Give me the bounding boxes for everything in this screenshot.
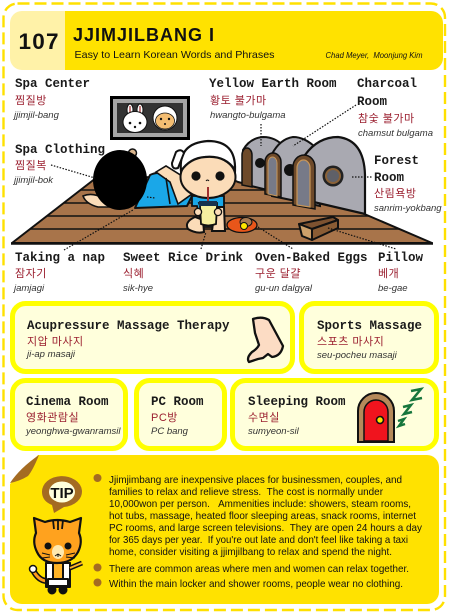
panel: cinema room: 영화관람실 [26,411,79,424]
panel: pc room: PC bang [151,426,189,437]
label: spa clothing: 찜질복 [15,159,47,172]
label: forest room: Forest [374,154,419,168]
label: forest room: 산림욕방 [374,187,416,200]
tip text: hot tubs, massage, heated floor sleeping areas, snack rooms, internet [109,511,416,522]
label: oven-baked eggs: gu-un dalgyal [255,283,313,294]
tip text [109,475,423,590]
label: charcoal room: Room [357,95,388,109]
label: spa center: Spa Center [15,77,90,91]
wall picture of rabbit and sheep [110,96,190,140]
tip bullets [94,474,102,586]
wood floor [11,176,433,244]
label: yellow earth room [209,77,337,121]
icon: zzz [398,389,422,426]
baked eggs plate [227,218,257,232]
label: forest room: sanrim-yokbang [374,203,442,214]
label: yellow earth room: 황토 불가마 [210,94,267,107]
panel: sleeping room [232,380,436,448]
tip text: PC rooms, and large screen televisions. They are open 24 hours a day [109,523,423,534]
panel: cinema room [12,380,126,448]
label: pillow: be-gae [378,283,408,294]
sleeping person [83,149,195,210]
tip text: Jjimjimbang are inexpensive places for businessmen, couples, and [109,475,402,486]
icon: red door [358,393,394,442]
subtitle: Easy to Learn Korean Words and Phrases [74,49,274,61]
tip text: 10,000won per person. Ammenities include: showers, steam rooms, [109,499,411,510]
label: spa clothing: jjimjil-bok [12,175,54,186]
tip text: families to relax and relieve stress. The cost is normally under [109,487,384,498]
tip text: There are common areas where men and women can relax together. [109,564,409,575]
label: oven-baked eggs: Oven-Baked Eggs [255,251,368,265]
label: spa clothing [12,143,105,186]
lesson number: 107 [18,29,58,54]
pillow [299,217,338,240]
boy with towel hat and drink [172,141,236,233]
label: forest room: Room [374,171,405,185]
label: sweet rice drink [123,251,244,294]
label: forest room [374,154,442,214]
panel: pc room: PC방 [151,411,178,424]
label: taking a nap: jamjagi [12,283,45,294]
panel: sleeping room: sumyeon-sil [248,426,300,437]
label: oven-baked eggs [255,251,368,294]
panel: tip [10,455,439,604]
label: yellow earth room: Yellow Earth Room [209,77,337,91]
panel: sleeping room: 수면실 [248,411,280,424]
label: yellow earth room: hwangto-bulgama [210,110,286,121]
label: spa clothing: Spa Clothing [15,143,105,157]
label: pillow: Pillow [378,251,424,265]
panel: cinema room: yeonghwa-gwanramsil [25,426,121,437]
panel: sports massage [302,304,436,372]
label: oven-baked eggs: 구운 달걀 [255,267,301,280]
page fold [10,455,39,483]
label: taking a nap: 잠자기 [15,267,47,280]
label: charcoal room: 참숯 불가마 [358,112,415,125]
panel: acupressure massage therapy: ji-ap masaji [25,349,76,360]
label: pillow: 베개 [378,267,399,280]
label: spa center: jjimjil-bang [12,110,60,121]
label: pillow [378,251,424,294]
authors: Chad Meyer, Moonjung Kim [326,50,422,60]
panel: acupressure massage therapy [12,304,292,372]
illustration: jjimjilbang room [11,96,433,244]
panel: sports massage: 스포츠 마사지 [317,335,384,348]
panel: cinema room: Cinema Room [26,395,109,409]
icon: pressing hand [248,318,283,362]
title: JJIMJILBANG I [73,25,214,45]
tip speech bubble: TIP [50,485,74,502]
tip text: Within the main locker and shower rooms, people wear no clothing. [109,579,403,590]
label: spa center: 찜질방 [15,94,47,107]
label: sweet rice drink: Sweet Rice Drink [123,251,244,265]
header banner [10,11,443,70]
label: sweet rice drink: sik-hye [123,283,153,294]
tip text: home, consider visiting a jjimjilbang to relax and spend the night. [109,547,392,558]
panel: pc room: PC Room [151,395,204,409]
panel: sports massage: seu-pocheu masaji [317,350,398,361]
middle oven [265,137,320,206]
panel: pc room [136,380,224,448]
label: spa center [12,77,90,121]
front oven [293,137,365,214]
cat mascot [30,518,82,594]
panel: sleeping room: Sleeping Room [248,395,346,409]
label: charcoal room [357,77,433,139]
tip speech bubble [42,476,82,513]
tip text: for 365 days per year. If you're out late and don't feel like taking a taxi [109,535,408,546]
label: charcoal room: Charcoal [357,77,417,91]
panel: acupressure massage therapy: 지압 마사지 [27,335,84,348]
label: taking a nap [12,251,105,294]
label: sweet rice drink: 식혜 [123,267,144,280]
back oven [242,137,292,196]
panel: sports massage: Sports Massage [317,319,422,333]
label: charcoal room: chamsut bulgama [358,128,433,139]
label: taking a nap: Taking a nap [15,251,105,265]
panel: acupressure massage therapy: Acupressure Massage Therapy [27,319,230,333]
leader lines [51,105,396,250]
